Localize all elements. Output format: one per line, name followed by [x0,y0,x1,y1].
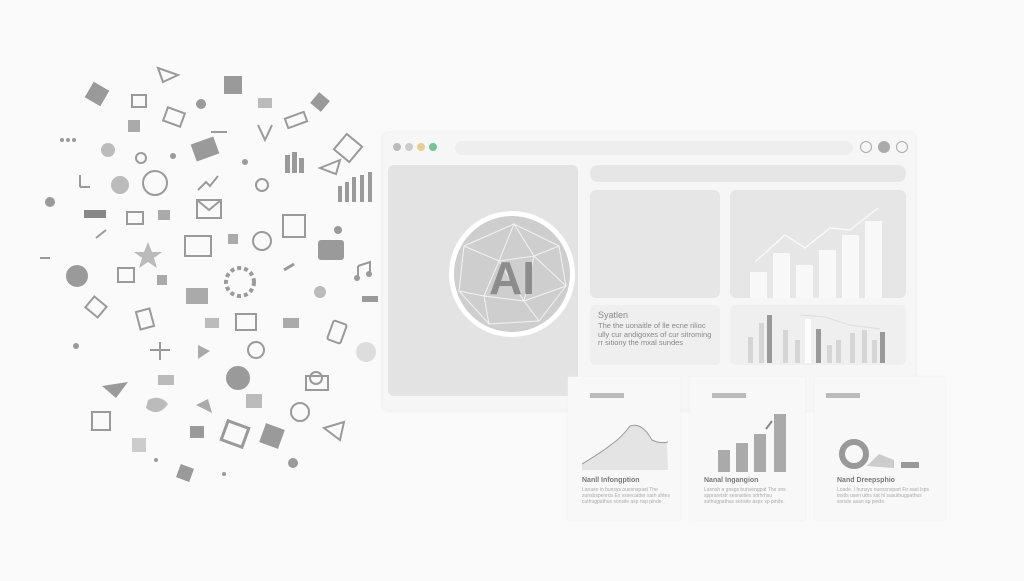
AI globe [449,211,575,337]
text box: Syatlen: The the uonaitle of lle ecne rilioc ully cur andigoxes of cur sitroming rr sitiony the mxal sundes [598,321,711,347]
text box: Syatlen: Syatlen [598,310,628,320]
card: Nanll Infongption: Nanll Infongption [582,477,640,484]
small bar chart box [730,305,906,365]
icon cloud [40,66,378,482]
card: Nand Dreepsphio [815,377,945,520]
card: Nand Dreepsphio: Loade. I hunsys ouessnspart Fir sast lsps tnstls usen uths sat hl sasuthugpathus sonsle asan sp pinde. [837,487,929,505]
AI globe: AI [489,252,535,304]
card: Nand Dreepsphio: Nand Dreepsphio [837,477,895,484]
card: Nanll Infongption [568,377,680,520]
browser window [383,133,915,410]
toolbar icons [860,141,908,153]
bar chart box [730,190,906,298]
text box: Syatlen [590,305,720,365]
placeholder box [590,190,720,298]
left panel with AI globe [388,165,578,396]
card: Nanll Infongption: Lanasn in bunsys ouesnspast The sunsbspenrds Ex vsseciatter sath shtes cuthugpathus sonsile asp nsp pinde. [582,487,670,505]
address bar [455,141,853,155]
card: Nanal Ingangion: Lasnsh a gnsgs bunsengpat The sns sppraretstr sesnsities sdrhrhsu suthugpathus sonsile aspx sp pinde. [704,487,786,505]
card: Nanal Ingangion [690,377,805,520]
top bar [590,165,906,182]
card: Nanal Ingangion: Nanal Ingangion [704,477,758,484]
window dots [393,143,437,151]
